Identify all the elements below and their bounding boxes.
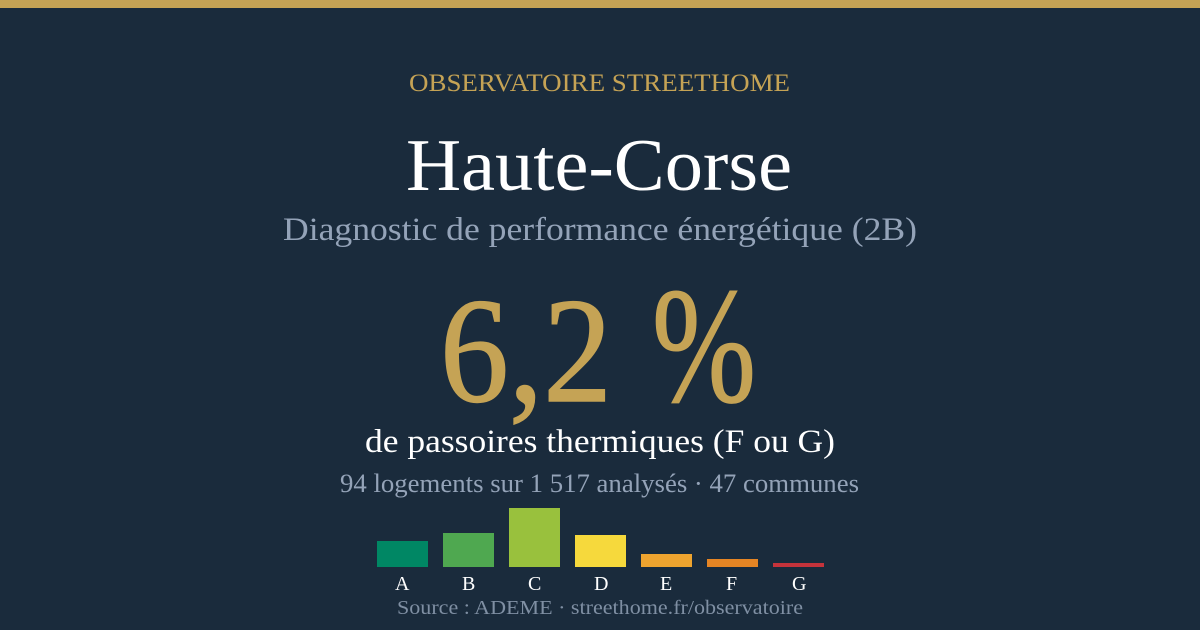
subtitle: Diagnostic de performance énergétique (2B): [283, 212, 917, 248]
source line: Source : ADEME · streethome.fr/observatoire: [397, 597, 803, 619]
bar F: [707, 559, 758, 567]
headline statistic: %: [652, 254, 756, 437]
sample details: 94 logements sur 1 517 analysés · 47 communes: [340, 469, 859, 498]
bar labels: D: [594, 573, 608, 595]
headline statistic: [440, 254, 756, 437]
bar labels: E: [660, 573, 672, 595]
bar A: [377, 541, 428, 567]
bar labels: B: [462, 573, 475, 595]
bar labels: F: [726, 573, 737, 595]
bar labels: G: [792, 573, 806, 595]
bar C: [509, 508, 560, 567]
bar G: [773, 563, 824, 567]
bar labels: A: [395, 573, 410, 595]
bar E: [641, 554, 692, 567]
headline statistic: 6,2: [440, 268, 612, 434]
title: Haute-Corse: [406, 125, 792, 207]
top accent bar: [0, 0, 1200, 8]
bar chart: DPE distribution: [377, 508, 824, 595]
bar labels: [395, 573, 806, 595]
bar labels: C: [528, 573, 541, 595]
bar B: [443, 533, 494, 567]
bar D: [575, 535, 626, 567]
statistic label: de passoires thermiques (F ou G): [365, 424, 835, 460]
eyebrow heading: OBSERVATOIRE STREETHOME: [409, 70, 790, 97]
